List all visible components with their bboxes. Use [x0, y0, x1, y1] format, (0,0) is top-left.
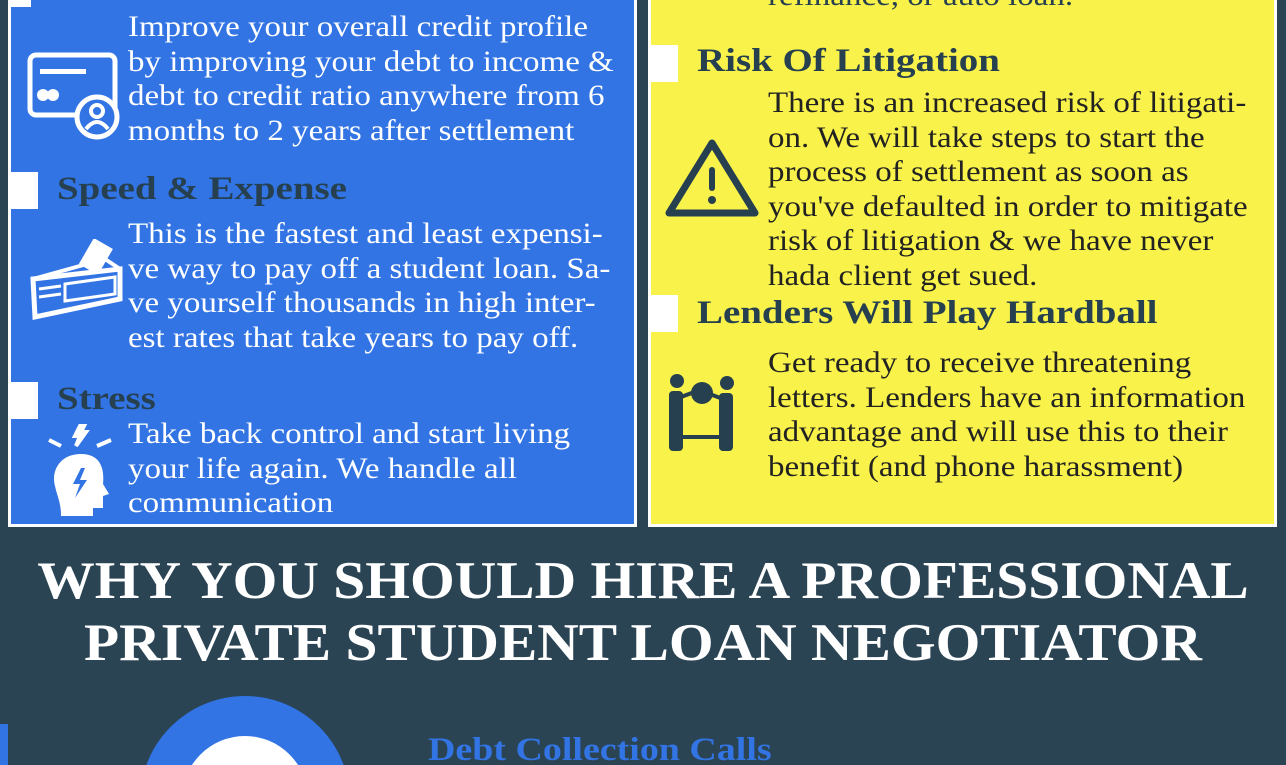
heading: Lenders Will Play Hardball: Lenders Will Play Hardball [697, 295, 1157, 331]
text: litigation [768, 86, 1248, 292]
text: speed [128, 217, 610, 354]
marker: stress [11, 382, 38, 419]
icon: warning triangle [666, 140, 758, 216]
marker: litigation [651, 45, 678, 82]
text: litigation: risk of litigation & we have never [768, 224, 1213, 257]
text: hardball [768, 346, 1245, 483]
title: WHY YOU SHOULD HIRE A PROFESSIONAL [37, 552, 1249, 610]
text: credit profile: by improving your debt to income & [128, 45, 614, 78]
text: credit profile: Improve your overall credit profile [128, 10, 588, 43]
heading: Stress: Stress [57, 381, 156, 417]
marker top [11, 0, 31, 7]
icon: wallet [30, 239, 122, 320]
text: speed: ve yourself thousands in high inter- [128, 286, 596, 319]
text: litigation: process of settlement as soon as [768, 155, 1189, 188]
text: litigation: on. We will take steps to start the [768, 121, 1205, 154]
icon: credit card [28, 52, 120, 140]
text: speed: est rates that take years to pay off. [128, 321, 578, 354]
title: PRIVATE STUDENT LOAN NEGOTIATOR [84, 614, 1202, 672]
text: speed: ve way to pay off a student loan. Sa- [128, 252, 610, 285]
text: credit profile: debt to credit ratio anywhere from 6 [128, 79, 604, 112]
text: litigation: There is an increased risk of litigati- [768, 86, 1246, 119]
text: stress: your life again. We handle all [128, 452, 517, 485]
icon: money handover [669, 374, 734, 451]
heading: Risk Of Litigation: Risk Of Litigation [697, 43, 1000, 79]
text: hardball: advantage and will use this to their [768, 415, 1228, 448]
marker: hardball [651, 295, 678, 332]
text: hardball: benefit (and phone harassment) [768, 450, 1183, 483]
title [37, 552, 1249, 672]
text: hardball: Get ready to receive threatening [768, 346, 1191, 379]
text: credit profile [128, 10, 614, 147]
text: stress [128, 417, 570, 519]
text: litigation: hada client get sued. [768, 259, 1037, 292]
heading: Speed & Expense: Speed & Expense [57, 171, 347, 207]
text: speed: This is the fastest and least expensi- [128, 217, 603, 250]
icon: circle badge [140, 696, 350, 765]
left edge blue bar [0, 724, 8, 765]
text: credit profile: months to 2 years after settlement [128, 114, 574, 147]
panel: benefits (blue) [8, 0, 637, 527]
text: hardball: letters. Lenders have an information [768, 381, 1245, 414]
text: litigation: you've defaulted in order to mitigate [768, 190, 1248, 223]
text: stress: Take back control and start living [128, 417, 570, 450]
marker: speed [11, 172, 38, 209]
icon: stressed head [48, 424, 112, 516]
text: stress: communication [128, 486, 333, 519]
panel: risks (yellow) [648, 0, 1277, 527]
bottom section [0, 696, 772, 765]
